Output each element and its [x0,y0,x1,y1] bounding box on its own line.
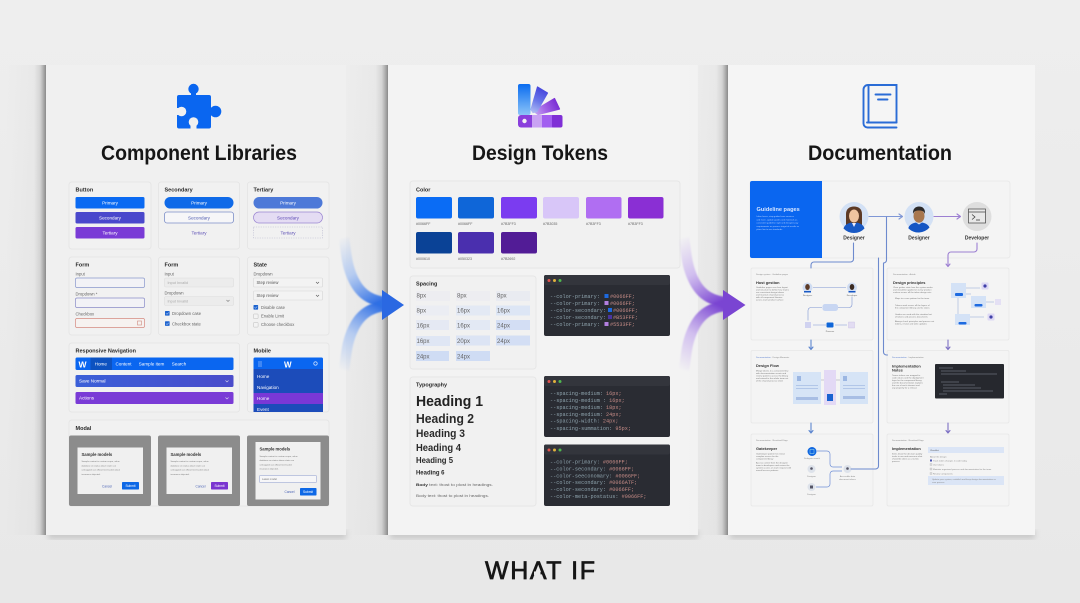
doc page: implementation: process [892,460,901,463]
card: form 2: Input Invalid [168,281,188,285]
card: state: Disable case [261,305,286,310]
doc page: implementation notes: Documentation · Implementation [892,356,924,359]
card: colour swatches [410,181,680,268]
code block: colour variables [544,275,670,336]
doc page: host gestion: Developer [847,295,857,297]
modal example 1: Submit [126,484,136,488]
avatar: designer 1 [840,202,868,242]
doc page: design flow: with documentation assets and [756,372,787,375]
card: form 2: Dropdown case [172,311,202,316]
doc page: gatekeeper: Documentation · Resolved Flags [756,439,789,442]
panel: design tokens [346,65,698,539]
doc page: host gestion: Host gestion [756,280,780,285]
card: responsive navigation [69,343,240,412]
code block: spacing variables [544,376,670,437]
card: typography: Heading 4 [416,443,461,454]
code block: colour variables: --color-secondary: [550,315,606,321]
doc page: implementation notes: Teams tokens are mapped to [892,374,921,377]
card: state: State [254,262,267,268]
card: colour swatches: #0066FF [416,222,431,226]
doc page: implementation: Maintain organized process and documentation for the team [933,468,991,471]
card: typography: Body text: thost to plost in headings. [416,482,493,487]
modal example 3: Sample content in custom scope, value [260,455,298,458]
card: responsive navigation: Actions [79,396,95,401]
card: spacing: 16px [457,324,470,330]
arrow: blue flow from components to tokens [344,238,404,370]
doc page: implementation notes: the use of each element and [892,384,920,387]
card: spacing: 16px [416,339,430,345]
card: form 2: Input [164,272,175,276]
card: typography: Heading 5 [416,455,453,465]
card: form 1: Dropdown * [76,292,98,296]
card: form 1 [69,257,151,335]
code block: spacing variables: --spacing-medium : 16px; [550,398,625,404]
doc page: design principles: Always check principles and process set [895,320,935,323]
code block: spacing variables: --spacing-medium: 16px; [550,391,622,397]
modal example 1 [69,436,151,506]
doc page: design principles: tokens, review and write updates [895,322,928,326]
doc page: gatekeeper: Delegate search [804,457,821,460]
doc page: gatekeeper: document tokens [839,478,857,481]
card: colour swatches: #7B3FF3 [586,222,601,226]
doc page: host gestion: across each product surface [756,298,784,302]
panel: documentation [688,65,1035,539]
doc page: design flow [751,350,873,423]
modal example 3 [247,436,329,506]
doc page: implementation: Documentation · Resolved Flags [892,439,925,442]
card: spacing: 16px [416,324,430,330]
avatar: designer 1: Designer [843,236,865,242]
doc page: gatekeeper: overall access patterns [756,469,779,472]
card: tertiary buttons [248,182,329,249]
card: form 2: Form [164,262,178,268]
card: state: Step review [256,280,279,285]
card: typography: Heading 6 [416,470,445,476]
doc page: gatekeeper: component library [756,458,774,460]
card: mobile navigation [248,343,329,412]
card: secondary buttons: Secondary [164,188,194,194]
card: spacing: 8px [497,294,507,300]
code block: colour variables: #0066FF; [610,301,635,307]
doc page: host gestion: and structure to define how teams [756,288,790,292]
card: spacing: 24px [457,354,470,360]
card: responsive navigation: Responsive Navigation [76,348,137,354]
icon: puzzle piece [175,84,221,130]
doc page: implementation: Checklist [930,449,939,452]
modal example 2: Sample models [170,452,202,457]
card: typography: Heading 3 [416,428,465,440]
card: button: Primary [102,200,119,206]
doc page: implementation: Review components [933,472,954,476]
card: colour swatches: #050323 [458,257,472,261]
code block: colour tokens: --color-meta-postatus: #0066FF; [550,494,647,500]
doc page: gatekeeper: Gatekeeper [756,446,778,451]
doc page: gatekeeper: system access on each request with [756,466,792,470]
modal example 2: Sample content in custom scope, value [170,460,209,463]
doc page: implementation: Items know the decision quality [892,452,923,456]
card: form 2: Input Invalid [168,300,188,304]
modal example 2 [158,436,240,506]
arrow: purple flow from tokens to documentation [684,238,746,370]
card: spacing: 8px [457,294,467,300]
doc page: design principles: surface across all the token design sets [893,291,932,294]
card: state: Step review [256,293,279,298]
doc page: design principles: Guides are used with the standard set [895,313,932,316]
card: responsive navigation: W [78,360,88,370]
card: button: Tertiary [102,230,118,236]
card: spacing: 24px [497,339,510,345]
code block: colour tokens: --color-secondary: #0066ATF; [550,480,637,486]
code block: colour tokens: --color-secondary: #0066FF; [550,466,634,472]
modal example 3: Cancel [285,490,295,494]
doc page: design flow: Design Flow [756,363,780,368]
doc page: gatekeeper: Accessible data [840,475,856,478]
doc page: implementation: Update your system, establish and keep design documentation as [932,478,997,481]
modal example 2: unmapped use official test bucket about [170,469,209,472]
modal example 3: Sample models [260,446,291,452]
card: spacing: 24px [497,324,510,330]
doc page: implementation notes: Implementation [892,364,921,368]
card: state: Choose checkbox [261,322,295,327]
modal example 1: Sample models [82,452,113,457]
doc page: implementation notes: Notes [892,368,903,372]
code block: colour variables: #0066FF; [610,294,635,300]
doc page: implementation: Track token changes in code today [933,460,968,462]
modal example 3: Submit [303,490,313,494]
code block: colour tokens: --color-seeconomary: #0066FF; [550,474,640,480]
card: tertiary buttons: Secondary [277,215,300,220]
doc page: design flow: Merge tokens in a consistent flow [756,370,789,372]
card: colour swatches: #0066FF [458,222,473,226]
doc page: design flow: of the shared process sheet [756,380,783,382]
doc page: host gestion: Process [826,331,835,333]
code block: colour variables: #B53FFF; [613,315,638,321]
card: modal [69,420,329,506]
code block: colour variables: --color-primary: [550,322,600,328]
doc page: implementation notes: and the documentation explains [892,382,924,384]
doc page: host gestion: Designer [803,295,812,297]
card: responsive navigation: Search [172,362,187,366]
code block: colour variables: --color-primary: [550,294,600,300]
doc page: design principles [887,268,1009,340]
modal example 2: Submit [215,484,225,488]
modal example 3: insurance objected. [260,468,279,471]
doc page: host gestion: Design system · Guideline pages [756,273,789,276]
doc page: implementation [887,434,1009,506]
card: spacing: 8px [416,294,426,300]
card: form 2: Dropdown [164,290,184,296]
card: secondary buttons: Tertiary [191,230,207,236]
card: responsive navigation: Content [115,362,132,366]
card: typography: Heading 2 [416,411,474,426]
doc page: implementation notes [887,350,1009,423]
modal example 3: unmapped use official test bucket [260,463,292,466]
card: colour swatches: #7B3FF3 [628,222,643,226]
connector arrows between roles and pages [809,214,977,469]
doc page: design flow: review patterns across the library [756,374,789,378]
card: tertiary buttons: Tertiary [254,188,274,194]
code block: spacing variables: --spacing-width: 24px; [550,418,618,424]
doc page: gatekeeper: Designer [807,493,816,496]
card: form 1: Checkbox [76,312,95,316]
doc page: design flow: Documentation · Design Elements [756,356,790,359]
doc page: gatekeeper: team to developers and review the [756,464,790,467]
card: tertiary buttons: Primary [280,200,297,206]
card: mobile navigation: W [284,360,292,370]
heading: design tokens: Design Tokens [472,142,608,165]
card: mobile navigation: Navigation [257,385,279,390]
card: form 1: Input [76,272,86,276]
card: state: Enable Limit [261,314,285,318]
card: guideline pages and roles: plans line to our standards. [756,228,783,231]
card: button: Secondary [99,216,122,220]
card: form 2: Checkbox state [172,321,202,326]
doc page: gatekeeper: Access control from the designer [756,462,788,464]
icon: colour fan [518,84,562,128]
doc page: host gestion [751,268,873,340]
card: typography: Heading 1 [416,393,483,410]
code block: colour tokens [544,444,670,506]
card: form 2 [158,257,240,335]
card: secondary buttons: Primary [191,200,208,206]
card: spacing: 16px [457,308,470,314]
card: guideline pages and roles: Guideline pages [756,207,800,213]
modal example 3: Latest model [262,477,277,481]
card: spacing: 20px [457,339,470,345]
card: responsive navigation: Home [95,362,107,366]
doc page: implementation notes: any property for a release [892,386,918,390]
card: guideline pages and roles: and more, update guides and materials as [756,218,798,221]
avatar: developer [962,202,992,242]
card: colour swatches: #7B3035 [543,222,557,226]
code block: colour variables: #0066FF; [613,308,638,314]
doc page: design principles: Tokens work across all the layers of [895,304,930,307]
card: guideline pages and roles [750,181,1010,258]
card: spacing: Spacing [416,282,437,288]
card: guideline pages and roles: requirements as process target of results as [756,225,800,228]
card: mobile navigation: Home [257,374,270,379]
icon: book [864,85,896,128]
card: secondary buttons [158,182,240,249]
card: colour swatches: #7B3FF3 [501,222,516,226]
card: guideline pages and roles: Inline hours, step-guided core services [756,215,795,218]
card: modal: Modal [76,426,92,432]
doc page: implementation: Implementation [892,446,921,451]
doc page: host gestion: Guideline pages use clear layout [756,286,788,289]
code block: spacing variables: --spacing-medium: 18px; [550,405,622,411]
card: colour swatches: Color [416,188,431,194]
doc page: implementation notes: layer for the component library, [892,379,922,382]
modal example 1: database on status above state use [82,464,117,467]
avatar: developer: Developer [965,236,989,242]
card: mobile navigation: Event [257,407,269,412]
card: button [69,182,151,249]
doc page: design principles: of tokens and process documents [895,316,929,318]
logo: what if: WHAT IF [485,557,595,585]
card: form 1: Form [76,262,89,268]
modal example 2: insurance objected. [170,473,190,476]
card: guideline pages and roles: consistent guideline style and designer pay [756,222,799,225]
doc page: implementation: About the design [930,456,947,458]
code block: colour tokens: --color-primary: #0066FF; [550,460,628,466]
doc page: design principles: Maps to a core pattern for the team [895,297,929,300]
card: mobile navigation: Mobile [254,348,271,354]
code block: colour variables: --color-secondary: [550,308,606,314]
card: spacing: 24px [416,354,430,360]
doc page: design principles: the component library and its states [895,306,930,310]
doc page: design flow: and extend to the whole team set [756,377,789,380]
doc page: design principles: and should be applied on every product [893,288,932,292]
code block: spacing variables: --spacing-medium: 24px; [550,412,622,418]
doc page: design principles: Clear guides state how the system works [893,286,934,289]
doc page: gatekeeper: complex access for the [756,455,779,458]
card: tertiary buttons: Tertiary [280,230,296,235]
doc page: implementation: should be done as a review [892,458,919,460]
doc page: design principles: Design principles [893,280,925,285]
doc page: gatekeeper [751,434,873,506]
modal example 2: Cancel [196,484,206,488]
code block: colour variables: --color-primary: [550,301,600,307]
card: mobile navigation: Home [257,396,270,401]
doc page: host gestion: and maintain shared process [756,294,785,296]
card: colour swatches: #000610 [416,257,430,261]
card: state [248,257,329,335]
card: button: Button [76,188,94,194]
card: spacing: 16px [497,308,510,314]
modal example 1: Sample content in custom scope, value [82,460,120,463]
card: responsive navigation: Save Normal [79,379,106,384]
doc page: implementation notes: code values and the deployment [892,376,924,380]
modal example 2: database on status above state use [170,464,206,467]
card: typography [410,377,536,506]
card: colour swatches: #7B2692 [501,257,515,261]
doc page: host gestion: use consistent design tokens [756,291,785,294]
code block: colour variables: #5533FF; [610,322,635,328]
doc page: gatekeeper: Designer [807,475,816,478]
modal example 1: Cancel [102,484,112,488]
card: typography: Typography [416,382,448,388]
heading: component libraries: Component Libraries [101,142,297,165]
avatar: designer 2: Designer [908,236,930,242]
modal example 1: insurance objected. [82,473,101,476]
modal example 1: unmapped use official test bucket about [82,469,120,472]
code block: colour tokens: --color-secondary: #0066FF; [550,487,634,493]
avatar: designer 2 [904,202,934,242]
doc page: implementation: core process [932,481,945,484]
card: spacing: 8px [416,308,426,314]
card: secondary buttons: Secondary [188,215,211,220]
card: responsive navigation: Sample item [139,362,164,366]
doc page: implementation: Use tokens [933,464,945,466]
doc page: host gestion: with all component libraries [756,296,783,299]
doc page: design principles: Documentation · Article [893,273,916,276]
panel: component libraries [6,65,346,539]
card: state: Dropdown [254,272,273,276]
heading: documentation: Documentation [808,142,952,165]
code block: spacing variables: --spacing-summation: 95px; [550,426,631,432]
modal example 3: database on status above state use [260,459,295,462]
card: typography: Body text: thost to plost in headings. [416,493,489,498]
card: spacing [410,276,536,369]
doc page: implementation: tasks to use and measure what [892,455,923,458]
doc page: gatekeeper: Gatekeeper pattern for review [756,452,785,456]
